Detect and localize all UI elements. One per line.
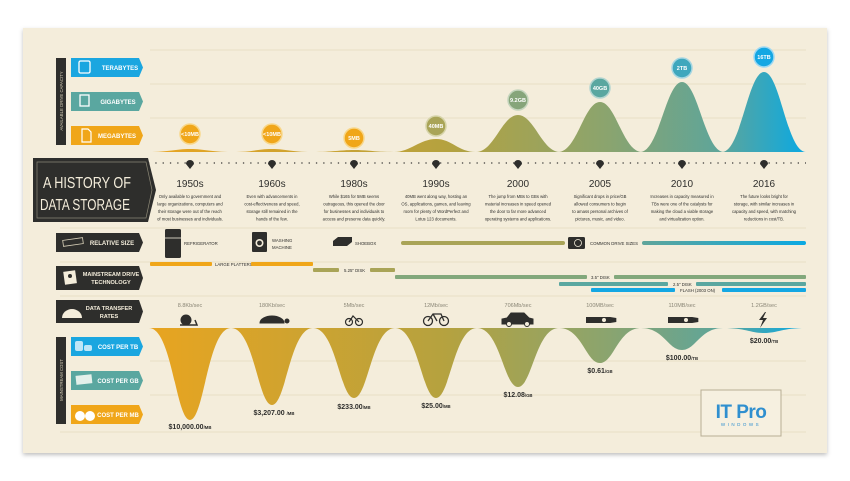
years and descriptions: OS, applications, games, and leaving [401,202,471,206]
capacity value bubbles: 40MB [429,124,443,130]
years and descriptions: 1990s [422,179,450,190]
transfer rates: 1.2GB/sec [751,303,777,309]
cost values: $10,000.00/MB [169,424,211,431]
years and descriptions: TBs were one of the catalysts for [652,202,713,206]
transfer rates: 706Mb/sec [505,303,532,309]
capacity value bubbles: <10MB [263,132,281,138]
years and descriptions: cost-effectiveness and speed, [244,202,300,206]
cost values: $100.00/TB [666,355,698,362]
tab: cost per mb: COST PER MB [97,413,140,419]
tab: mainstream drive technology: MAINSTREAM DRIVE [83,272,140,278]
drive technology bars: 5.25" DISK [344,268,365,273]
cost values: $12.08/GB [503,392,533,399]
capacity axis label: AVAILABLE DRIVE CAPACITY [59,71,64,131]
capacity value bubbles [180,47,774,148]
transfer rates: 12Mb/sec [424,303,448,309]
years and descriptions: large organizations, computers and [157,202,223,206]
tab: cost per tb: COST PER TB [98,345,139,351]
tab: terabytes [71,58,143,77]
transfer rates [178,303,777,309]
drive technology bars: FLASH (2003 ON) [680,288,716,293]
years and descriptions: hands of the few. [256,216,288,222]
years and descriptions: for businesses and individuals to [324,209,385,214]
years and descriptions: storage still remained in the [246,209,298,214]
tab: data transfer rates [56,300,143,323]
logo: IT Pro Windows [701,390,781,436]
capacity value bubbles: <10MB [181,132,199,138]
drive technology bars: 3.5" DISK [591,275,610,280]
timeline dotted [148,162,806,164]
years and descriptions: Only available to government and [159,194,222,199]
cost values: $233.00/MB [337,404,371,411]
years and descriptions: The jump from MBs to GBs with [488,194,548,199]
relative size items: SHOEBOX [355,241,376,246]
capacity value bubbles: 2TB [677,66,687,72]
tab: cost per gb [71,371,143,390]
years and descriptions: material increases in speed opened [485,202,552,206]
years and descriptions: room for plenty of WordPerfect and [403,209,469,214]
tab: cost per gb: COST PER GB [97,379,139,385]
years and descriptions: their storage were out of the reach [158,209,223,214]
transfer rates: 100MB/sec [586,303,614,309]
title [33,158,156,222]
tab: megabytes: MEGABYTES [98,134,136,140]
years and descriptions: Significant drops in price/GB [574,194,627,199]
years and descriptions: 2016 [753,179,776,190]
tab: data transfer rates: RATES [100,314,119,320]
years and descriptions: operating systems and applications. [485,216,551,222]
tab: mainstream drive technology [56,266,143,290]
capacity bells chart [148,72,806,152]
years and descriptions: 40MB went along way, hosting an [405,194,468,199]
logo: IT Pro Windows: IT Pro [716,402,766,423]
capacity value bubbles: 40GB [593,86,607,92]
years and descriptions: reductions in cost/TB. [744,216,784,222]
capacity value bubbles: 5MB [348,136,360,142]
capacity value bubbles: 9.2GB [510,98,526,104]
years and descriptions: 1960s [258,179,286,190]
cost values: $20.00/TB [750,338,778,345]
transfer rates: 5Mb/sec [344,303,365,309]
years and descriptions: 2000 [507,179,530,190]
years and descriptions: outrageous, this opened the door [323,202,385,206]
years and descriptions: 1950s [176,179,204,190]
relative size items [165,229,806,258]
tab: gigabytes: GIGABYTES [100,100,136,106]
years and descriptions: allowed consumers to begin [574,202,627,206]
years and descriptions: Increases in capacity measured in [650,194,714,199]
capacity value bubbles: 16TB [757,55,771,61]
years and descriptions: making the cloud a viable storage [651,209,714,214]
years and descriptions: pictures, music, and video. [575,216,625,222]
years and descriptions: storage, with similar increases in [734,202,795,206]
tab: data transfer rates: DATA TRANSFER [86,306,132,312]
relative size items: REFRIGERATOR [184,241,218,246]
cost values: $3,207.00 /MB [254,410,294,417]
cost values [169,338,778,431]
drive technology bars: LARGE PLATTERS [215,262,253,267]
cost values: $25.00/MB [421,403,451,410]
years and descriptions: Lotus 123 documents. [415,216,457,222]
transfer icons [180,312,767,328]
years and descriptions: access and preserve data quickly. [323,216,385,222]
tab: relative size [56,233,143,252]
years and descriptions: 2010 [671,179,694,190]
cost curves chart [149,328,806,420]
tab: mainstream drive technology: TECHNOLOGY [91,280,131,286]
tab: relative size: RELATIVE SIZE [90,241,134,247]
relative size items: COMMON DRIVE SIZES [590,241,638,246]
transfer rates: 8.8Kb/sec [178,303,202,309]
title: DATA STORAGE [40,197,130,214]
cost axis label: MAINSTREAM COST [59,359,64,401]
drive technology bars [150,262,806,293]
tab: terabytes: TERABYTES [102,66,138,72]
logo: IT Pro Windows: WINDOWS [721,422,761,427]
years and descriptions: to amass personal archives of [572,209,629,214]
title: A HISTORY OF [43,175,131,192]
drive technology bars: 2.5" DISK [673,282,692,287]
years and descriptions [157,179,797,222]
cost axis label [56,337,66,424]
years and descriptions: of most businesses and individuals. [157,216,223,222]
transfer rates: 110MB/sec [668,303,696,309]
relative size items: WASHING [272,238,293,243]
years and descriptions: 2005 [589,179,612,190]
years and descriptions: capacity and speed, with matching [732,209,797,214]
years and descriptions: While $165 for 5MB seems [329,194,379,199]
tab: megabytes [71,126,143,145]
tab: cost per mb [71,405,143,424]
transfer rates: 180Kb/sec [259,303,285,309]
tab: cost per tb [71,337,143,356]
years and descriptions: the door to far more advanced [490,209,547,214]
years and descriptions: 1980s [340,179,368,190]
cost values: $0.61/GB [587,368,613,375]
years and descriptions: and virtualization option. [659,216,705,222]
tab: gigabytes [71,92,143,111]
relative size items: MACHINE [272,245,292,250]
capacity axis label [56,58,66,145]
years and descriptions: The future looks bright for [740,194,788,199]
years and descriptions: Even with advancements in [247,194,298,199]
